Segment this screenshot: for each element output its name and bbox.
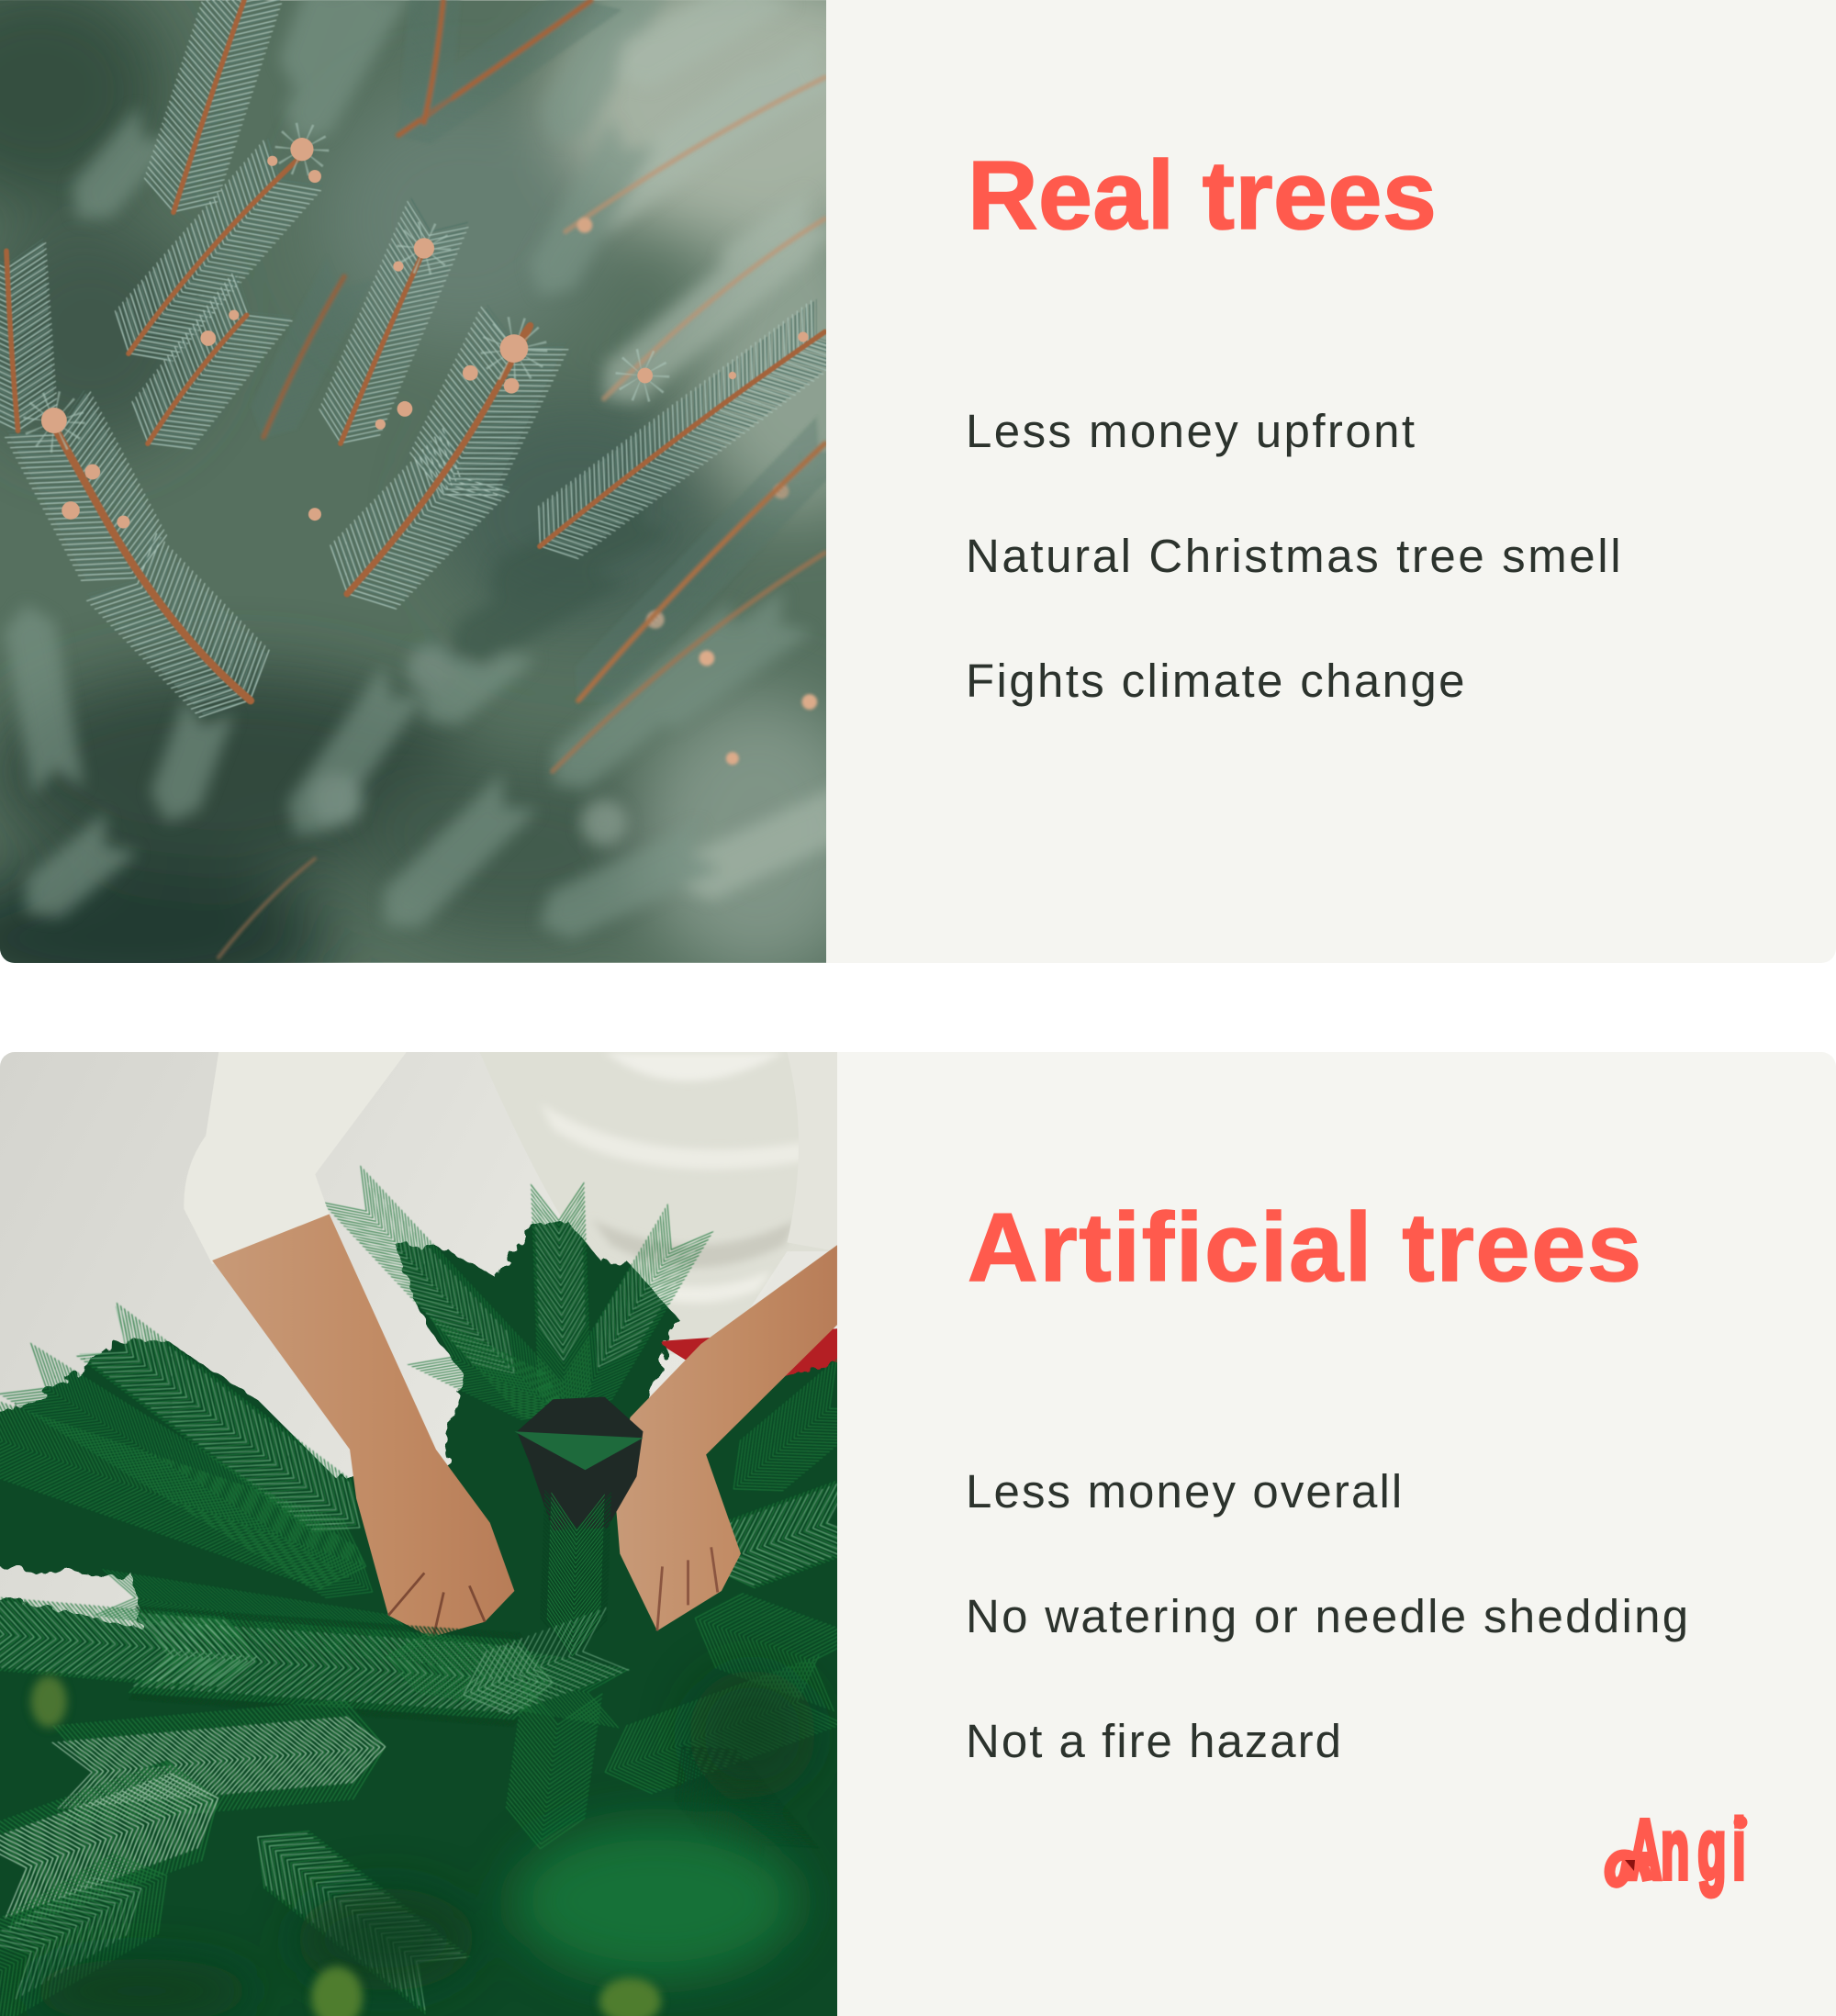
tree branches behind arms — [0, 1186, 856, 1652]
foreground green branches — [0, 1606, 840, 2008]
photo: person assembling artificial tree — [0, 1052, 837, 2016]
olive blurred tips — [31, 1675, 661, 2016]
photo background: hazy green foliage — [0, 0, 938, 1015]
tree silhouette — [0, 1219, 862, 2016]
red garment — [655, 1328, 837, 1406]
in-focus branches with brown stems — [0, 0, 836, 710]
logo: Angi: Angi — [1629, 1802, 1745, 1897]
black plastic tree pole — [514, 1396, 643, 1639]
sleeve of shirt — [184, 1052, 407, 1264]
text: not a fire hazard: Not a fire hazard — [966, 1715, 1343, 1767]
blurred foreground foliage — [26, 1669, 817, 2016]
out-of-focus branches — [15, 0, 848, 932]
out-of-focus stems and buds — [218, 77, 825, 958]
text: less money overall: Less money overall — [966, 1465, 1404, 1518]
heading: artificial trees: Artificial trees — [968, 1193, 1643, 1302]
panel: real trees — [0, 0, 1836, 963]
heading: real trees: Real trees — [968, 141, 1437, 250]
photo: real fir branches — [0, 0, 826, 963]
right arm and hand — [615, 1245, 837, 1630]
left arm and hand — [212, 1215, 514, 1637]
panel: artificial trees — [0, 1052, 1836, 2016]
text: no watering: No watering or needle shedding — [966, 1590, 1690, 1642]
pine cone buds — [41, 138, 808, 529]
wall — [0, 1052, 837, 2016]
text: fights climate change: Fights climate change — [966, 655, 1467, 707]
text: natural smell: Natural Christmas tree smell — [966, 530, 1623, 582]
text: less money upfront: Less money upfront — [966, 405, 1416, 457]
mid-focus branches — [257, 0, 836, 701]
shirt torso — [480, 1052, 837, 1354]
